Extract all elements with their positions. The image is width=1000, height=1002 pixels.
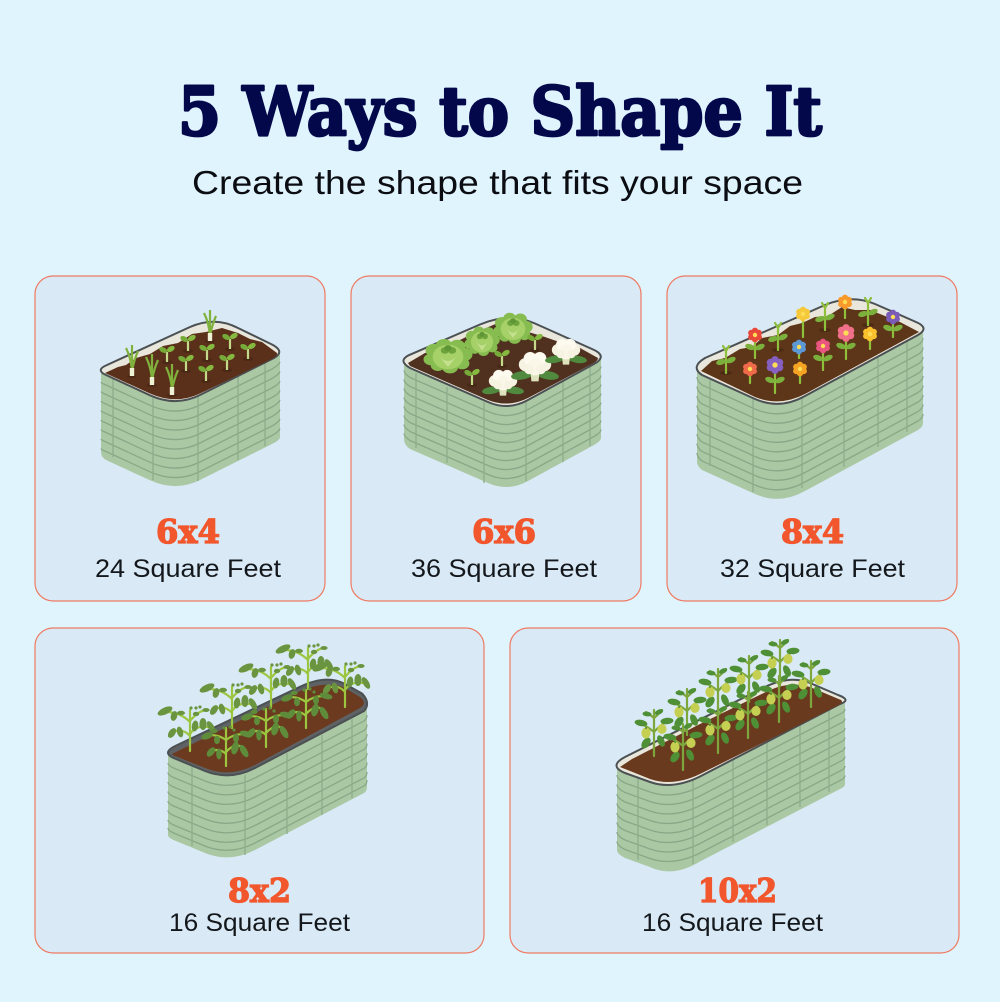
panel: 6x6 bed <box>351 276 641 601</box>
illustration: 6x6 raised bed with lettuce and cauliflower <box>403 313 601 487</box>
subtitle: Create the shape that fits your space <box>192 164 803 201</box>
illustration: 8x2 raised bed with tomato plants <box>156 643 372 857</box>
area label: 36 Square Feet <box>411 555 597 583</box>
size label: 8x4 <box>781 512 844 551</box>
area label: 32 Square Feet <box>720 555 905 583</box>
size label: 6x4 <box>156 512 220 551</box>
area label: 16 Square Feet <box>642 909 823 937</box>
size label: 8x2 <box>228 871 291 910</box>
area label: 16 Square Feet <box>169 909 350 937</box>
illustration: 8x4 raised bed with flowers <box>697 295 924 499</box>
size label: 10x2 <box>698 871 777 910</box>
illustration: 6x4 raised bed with seedlings <box>101 310 280 486</box>
size label: 6x6 <box>472 512 536 551</box>
panel: 10x2 bed <box>510 628 959 953</box>
area label: 24 Square Feet <box>95 555 281 583</box>
panel: 6x4 bed <box>35 276 325 601</box>
panel: 8x4 bed <box>667 276 957 601</box>
panel: 8x2 bed <box>35 628 484 953</box>
illustration: 10x2 raised bed with pepper plants <box>616 638 846 871</box>
title: 5 Ways to Shape It <box>178 72 822 151</box>
